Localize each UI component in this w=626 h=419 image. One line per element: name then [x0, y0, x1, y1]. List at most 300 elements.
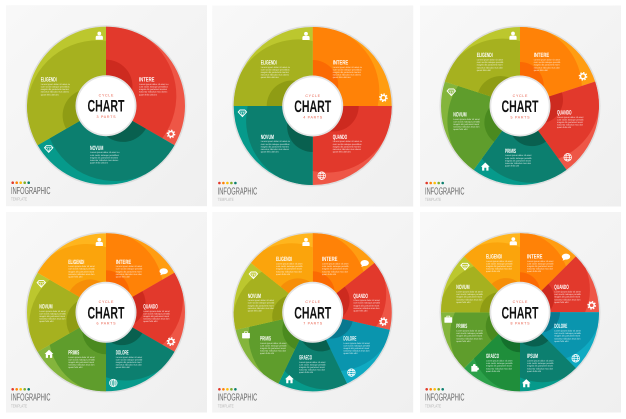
segment: DOLORE blue [299, 312, 390, 390]
text: GRAECO: cum sociis natoque penatib [299, 363, 326, 366]
text: INTERE: quam felis ultricies [333, 76, 352, 79]
text: INTERE: Lorem ipsum dolor sit amet cu [139, 83, 169, 86]
text: ELIGENDI: Lorem ipsum dolor sit amet [477, 58, 503, 62]
text: PRIMIS: cum sociis natoque penatib [456, 332, 484, 335]
text: ELIGENDI [276, 256, 303, 276]
text: QUANDO: magnis dis parturient mont [353, 304, 380, 307]
segment: ELIGENDI yellow [464, 217, 560, 312]
text: QUANDO: cum sociis natoque penatib [353, 302, 381, 305]
center hub: CHART [88, 97, 125, 116]
logo: infographic template: INFOGRAPHIC [425, 186, 464, 197]
text: QUANDO: quam felis ultri [557, 126, 572, 129]
text: GRAECO [299, 354, 326, 374]
text: ELIGENDI: ELIGENDI [68, 259, 84, 266]
text: QUANDO [353, 293, 381, 312]
text: ELIGENDI: ELIGENDI [276, 256, 292, 263]
icon: diamond [238, 110, 247, 117]
icon: person [96, 238, 103, 246]
text: PRIMIS: PRIMIS [260, 335, 271, 342]
text: ELIGENDI: cum sociis natoque penatibus [41, 85, 70, 88]
text: GRAECO: cum sociis natoque penatib [486, 362, 513, 365]
text: QUANDO: magnis dis parturient mont [554, 296, 580, 299]
text: ELIGENDI: magnis dis parturient mont [486, 265, 512, 268]
center hub [490, 76, 550, 136]
text: INTERE: magnis dis parturient montes [139, 88, 168, 91]
text: GRAECO: GRAECO [299, 354, 312, 361]
text: DOLORE: DOLORE [554, 323, 567, 330]
segment: ELIGENDI olive [234, 27, 313, 106]
icon: globe [564, 154, 572, 161]
segment: INTERE orange [106, 233, 174, 312]
text: INTERE: nascetur ridiculus mus don [322, 270, 349, 273]
text: INTERE: quam felis ultri [116, 275, 130, 278]
text: DOLORE: quam felis ultri [554, 340, 569, 343]
segment: INTERE orange [313, 27, 392, 106]
text: GRAECO: Lorem ipsum dolor sit amet [299, 361, 326, 364]
text: ELIGENDI: quam felis ultri [68, 275, 83, 278]
segment: DOLORE blue [520, 312, 599, 368]
text: INTERE: Lorem ipsum dolor sit amet [116, 265, 142, 268]
text: NOVUM: magnis dis parturient montes [261, 145, 290, 148]
text: QUANDO: nascetur ridiculus mus don [353, 307, 380, 310]
text: NOVUM: NOVUM [453, 112, 467, 119]
text: IPSUM: Lorem ipsum dolor sit amet [527, 359, 554, 362]
segment: QUANDO red [313, 263, 413, 361]
text: NOVUM: nascetur ridiculus mus don [39, 318, 66, 321]
text: QUANDO: Lorem ipsum dolor sit amet [353, 299, 380, 302]
text: INTERE: nascetur ridiculus mus don [527, 268, 554, 271]
icon: diamond [447, 89, 456, 96]
segment: PRIMIS green [38, 312, 106, 391]
text: PRIMIS: quam felis ultri [68, 366, 83, 369]
text: ELIGENDI: nascetur ridiculus mus don [276, 270, 303, 273]
text: INTERE: nascetur ridiculus mus don [534, 66, 561, 69]
text: DOLORE: nascetur ridiculus mus don [116, 364, 143, 367]
text: INTERE: INTERE [527, 253, 542, 260]
center hub: CHART [502, 97, 539, 116]
text: NOVUM [248, 293, 275, 312]
logo: infographic template: INFOGRAPHIC [11, 186, 50, 197]
text: PRIMIS: magnis dis parturient mont [505, 159, 531, 162]
icon: diamond [461, 263, 469, 270]
text: INTERE: quam felis ultri [527, 270, 542, 273]
text: QUANDO: QUANDO [557, 110, 572, 117]
text: IPSUM: cum sociis natoque penatib [527, 362, 554, 365]
text: NOVUM [261, 134, 291, 154]
icon: home [481, 162, 490, 171]
logo: infographic template: TEMPLATE [218, 403, 234, 408]
icon: gear [380, 94, 387, 101]
center hub: 5 PARTS [510, 115, 530, 119]
text: DOLORE: Lorem ipsum dolor sit amet [554, 329, 581, 332]
text: NOVUM: Lorem ipsum dolor sit amet cu [90, 151, 120, 154]
text: PRIMIS: PRIMIS [456, 323, 467, 330]
text: INTERE: cum sociis natoque penatibus [333, 68, 362, 71]
icon: chat [360, 260, 369, 267]
text: GRAECO: quam felis ultri [486, 370, 501, 373]
segment: NOVUM olive [441, 256, 520, 312]
text: ELIGENDI: quam felis ultri [276, 273, 291, 276]
text: INTERE: cum sociis natoque penatib [116, 268, 143, 271]
icon: home [522, 379, 531, 387]
center hub: 8 PARTS [510, 322, 530, 326]
text: QUANDO: magnis dis parturient mont [143, 315, 169, 318]
text: ELIGENDI: magnis dis parturient montes [41, 88, 70, 91]
text: QUANDO: nascetur ridiculus mus don [554, 298, 581, 301]
text: GRAECO: nascetur ridiculus mus don [299, 369, 326, 372]
text: DOLORE [343, 336, 371, 355]
text: INTERE: quam felis ultri [534, 69, 548, 72]
text: PRIMIS [68, 350, 96, 369]
text: PRIMIS [260, 336, 287, 355]
text: ELIGENDI: Lorem ipsum dolor sit amet cu [261, 66, 291, 69]
logo: infographic template: TEMPLATE [425, 197, 441, 202]
text: QUANDO: quam felis ultricies [333, 151, 352, 154]
text: QUANDO [557, 110, 584, 129]
text: QUANDO: cum sociis natoque penatibus [333, 143, 362, 146]
text: IPSUM: quam felis ultri [527, 370, 542, 373]
text: NOVUM: NOVUM [456, 284, 470, 291]
text: INTERE [527, 253, 554, 273]
panel: cycle chart 5 parts [413, 6, 621, 214]
panel: cycle chart 3 parts [0, 5, 207, 214]
text: GRAECO: GRAECO [486, 353, 499, 360]
text: NOVUM: cum sociis natoque penatib [453, 120, 481, 123]
icon: briefcase [444, 316, 452, 323]
text: QUANDO: nascetur ridiculus mus don [143, 318, 170, 321]
center hub: 4 PARTS [303, 115, 323, 119]
text: NOVUM: nascetur ridiculus mus don [248, 307, 275, 310]
segment: PRIMIS green [223, 285, 313, 383]
logo: infographic template: INFOGRAPHIC [218, 186, 257, 197]
text: PRIMIS: PRIMIS [68, 349, 79, 356]
text: NOVUM: magnis dis parturient montes [90, 156, 119, 159]
text: QUANDO: Lorem ipsum dolor sit amet cu [333, 140, 363, 143]
text: INTERE: INTERE [333, 59, 348, 66]
icon: gear [588, 302, 595, 309]
text: NOVUM: cum sociis natoque penatibus [261, 143, 290, 146]
segment: INTERE orange [313, 233, 374, 312]
text: ELIGENDI: ELIGENDI [477, 52, 493, 59]
text: INTERE [333, 60, 363, 79]
text: ELIGENDI: quam felis ultricies [41, 93, 60, 96]
text: ELIGENDI: cum sociis natoque penatibus [261, 68, 290, 71]
icon: chat [562, 254, 570, 261]
logo: infographic template [425, 388, 464, 408]
logo: infographic template [218, 182, 257, 202]
text: ELIGENDI [41, 77, 71, 96]
text: NOVUM: magnis dis parturient mont [456, 296, 482, 299]
icon: gear [167, 130, 175, 138]
text: INTERE: nascetur ridiculus mus donec [139, 91, 168, 94]
text: ELIGENDI: magnis dis parturient mont [477, 64, 503, 67]
text: QUANDO: quam felis ultri [353, 309, 368, 312]
text: ELIGENDI: Lorem ipsum dolor sit amet cu [41, 83, 71, 86]
segment: GRAECO dark green [464, 312, 520, 391]
text: ELIGENDI: nascetur ridiculus mus don [68, 273, 95, 276]
text: NOVUM: NOVUM [39, 303, 53, 310]
text: ELIGENDI: magnis dis parturient mont [68, 270, 94, 273]
center hub: CYCLE [513, 94, 528, 98]
segment: NOVUM teal [32, 86, 174, 214]
text: DOLORE: quam felis ultri [116, 366, 130, 369]
segment: NOVUM olive [3, 253, 106, 352]
text: IPSUM: nascetur ridiculus mus don [527, 367, 554, 370]
icon: diamond [44, 146, 53, 152]
text: GRAECO [486, 353, 513, 373]
text: NOVUM: Lorem ipsum dolor sit amet [453, 118, 480, 121]
text: PRIMIS: quam felis ultri [505, 165, 520, 168]
text: PRIMIS: quam felis ultri [260, 352, 275, 355]
text: PRIMIS [505, 148, 532, 168]
text: QUANDO: cum sociis natoque penatib [557, 118, 584, 121]
logo: infographic template [425, 182, 464, 202]
text: PRIMIS: Lorem ipsum dolor sit amet [260, 342, 287, 345]
segment: ELIGENDI yellow [38, 214, 140, 312]
icon: briefcase [242, 332, 250, 338]
text: INTERE: cum sociis natoque penatib [527, 262, 554, 265]
text: DOLORE: nascetur ridiculus mus don [554, 337, 581, 340]
center hub: CHART [294, 303, 332, 322]
text: INTERE: nascetur ridiculus mus don [116, 273, 143, 276]
center hub: CYCLE [305, 300, 321, 304]
logo: infographic template: INFOGRAPHIC [11, 393, 50, 404]
text: NOVUM: Lorem ipsum dolor sit amet [456, 290, 483, 293]
text: NOVUM: quam felis ultri [39, 320, 54, 323]
center hub: 6 PARTS [96, 322, 116, 326]
logo: infographic template: TEMPLATE [425, 403, 441, 408]
text: INTERE: Lorem ipsum dolor sit amet cu [333, 66, 363, 69]
logo: infographic template [11, 388, 50, 408]
text: NOVUM: magnis dis parturient mont [248, 304, 274, 307]
text: NOVUM: NOVUM [248, 293, 261, 300]
text: INTERE: Lorem ipsum dolor sit amet [527, 260, 554, 263]
text: QUANDO: QUANDO [333, 134, 347, 141]
segment: ELIGENDI olive [0, 18, 140, 145]
text: DOLORE: cum sociis natoque penatib [116, 358, 143, 361]
text: ELIGENDI: cum sociis natoque penatib [68, 268, 96, 271]
text: GRAECO: Lorem ipsum dolor sit amet [486, 359, 513, 362]
text: DOLORE: cum sociis natoque penatib [554, 332, 582, 335]
text: PRIMIS: cum sociis natoque penatib [260, 344, 287, 347]
text: QUANDO: nascetur ridiculus mus don [557, 124, 584, 127]
text: ELIGENDI: quam felis ultri [477, 69, 491, 72]
text: PRIMIS [456, 323, 484, 343]
text: NOVUM: nascetur ridiculus mus don [453, 126, 480, 129]
segment: INTERE red [106, 27, 185, 145]
icon: person [302, 238, 310, 246]
icon: person [509, 32, 517, 40]
text: INTERE: INTERE [116, 259, 131, 266]
center hub [76, 282, 136, 343]
panel: cycle chart 8 parts [420, 212, 621, 412]
text: NOVUM: Lorem ipsum dolor sit amet [39, 310, 66, 313]
text: ELIGENDI: ELIGENDI [261, 59, 277, 66]
icon: globe [318, 172, 326, 180]
text: ELIGENDI: magnis dis parturient montes [261, 71, 290, 74]
text: NOVUM: NOVUM [90, 145, 103, 152]
panel: cycle chart 6 parts [3, 212, 209, 412]
text: QUANDO: QUANDO [353, 293, 368, 300]
text: NOVUM: nascetur ridiculus mus donec [90, 159, 119, 162]
text: PRIMIS: PRIMIS [505, 148, 516, 155]
text: NOVUM [456, 284, 484, 304]
text: DOLORE [116, 350, 143, 369]
text: ELIGENDI: quam felis ultricies [261, 76, 280, 79]
text: GRAECO: magnis dis parturient mont [486, 365, 512, 368]
text: QUANDO [333, 134, 363, 154]
text: INTERE: INTERE [139, 77, 154, 84]
text: NOVUM: cum sociis natoque penatib [248, 302, 275, 305]
text: NOVUM: magnis dis parturient mont [453, 123, 479, 126]
text: GRAECO: magnis dis parturient mont [299, 366, 325, 369]
text: ELIGENDI: nascetur ridiculus mus don [486, 268, 513, 271]
center hub: CYCLE [305, 94, 321, 98]
text: INTERE [534, 52, 561, 72]
text: NOVUM: quam felis ultricies [261, 151, 280, 154]
text: DOLORE: magnis dis parturient mont [343, 347, 370, 350]
logo: infographic template: TEMPLATE [218, 197, 234, 202]
segment: INTERE orange [520, 27, 595, 106]
text: NOVUM [90, 145, 120, 165]
text: NOVUM: cum sociis natoque penatibus [90, 154, 120, 157]
text: DOLORE: DOLORE [343, 335, 356, 342]
segment: QUANDO red [313, 106, 392, 185]
text: ELIGENDI: quam felis ultri [486, 270, 501, 273]
segment: NOVUM olive [222, 252, 313, 330]
icon: diamond [249, 272, 258, 279]
text: ELIGENDI [486, 253, 513, 273]
text: INTERE [322, 256, 349, 276]
text: DOLORE: Lorem ipsum dolor sit amet [116, 356, 142, 359]
text: NOVUM: quam felis ultricies [90, 162, 109, 165]
text: INTERE: Lorem ipsum dolor sit amet [322, 262, 349, 265]
text: NOVUM: NOVUM [261, 134, 274, 141]
text: PRIMIS: Lorem ipsum dolor sit amet [456, 329, 483, 332]
text: PRIMIS: Lorem ipsum dolor sit amet [505, 154, 532, 157]
text: DOLORE: cum sociis natoque penatib [343, 344, 371, 347]
text: NOVUM: Lorem ipsum dolor sit amet [248, 299, 274, 302]
text: ELIGENDI: cum sociis natoque penatib [276, 265, 303, 268]
text: ELIGENDI: nascetur ridiculus mus donec [261, 74, 290, 77]
text: QUANDO: Lorem ipsum dolor sit amet [557, 116, 584, 119]
text: DOLORE: quam felis ultri [343, 352, 358, 355]
text: ELIGENDI: nascetur ridiculus mus donec [41, 91, 70, 94]
text: ELIGENDI [261, 60, 291, 79]
text: PRIMIS: nascetur ridiculus mus don [505, 162, 532, 165]
center hub [282, 76, 343, 136]
text: PRIMIS: magnis dis parturient mont [260, 347, 286, 350]
center hub: CHART [88, 303, 125, 322]
text: INTERE: cum sociis natoque penatibus [139, 85, 169, 88]
text: INTERE [116, 259, 143, 278]
text: NOVUM [39, 304, 67, 323]
text: QUANDO: Lorem ipsum dolor sit amet [143, 310, 170, 313]
segment: IPSUM teal [480, 312, 576, 408]
icon: person [96, 32, 103, 40]
text: INTERE: magnis dis parturient mont [534, 64, 560, 67]
logo: infographic template: TEMPLATE [11, 403, 27, 408]
logo: infographic template: INFOGRAPHIC [425, 393, 464, 404]
text: ELIGENDI: Lorem ipsum dolor sit amet [276, 262, 303, 265]
text: QUANDO [554, 284, 582, 304]
text: GRAECO: nascetur ridiculus mus don [486, 367, 513, 370]
segment: QUANDO red [520, 256, 615, 352]
text: ELIGENDI: ELIGENDI [41, 77, 57, 84]
segment: GRAECO teal [257, 312, 347, 410]
text: PRIMIS: quam felis ultri [456, 340, 471, 343]
text: QUANDO [143, 304, 171, 323]
center hub: 7 PARTS [303, 322, 323, 326]
center hub: 3 PARTS [96, 115, 116, 119]
text: ELIGENDI: ELIGENDI [486, 253, 502, 260]
text: PRIMIS: magnis dis parturient mont [456, 335, 482, 338]
icon: gear [579, 73, 587, 80]
text: INTERE: INTERE [322, 256, 338, 263]
icon: gear [380, 318, 387, 325]
center hub: CYCLE [99, 300, 114, 304]
text: INTERE: magnis dis parturient mont [527, 265, 553, 268]
text: INTERE: magnis dis parturient mont [116, 270, 142, 273]
text: DOLORE: magnis dis parturient mont [116, 361, 142, 364]
panel: cycle chart 4 parts [212, 6, 413, 206]
logo: infographic template: TEMPLATE [11, 197, 27, 202]
icon: person [510, 237, 517, 245]
text: QUANDO: cum sociis natoque penatib [554, 293, 582, 296]
text: PRIMIS: cum sociis natoque penatib [68, 358, 96, 361]
text: ELIGENDI: Lorem ipsum dolor sit amet [68, 265, 95, 268]
text: NOVUM: nascetur ridiculus mus donec [261, 148, 290, 151]
text: IPSUM: IPSUM [527, 353, 538, 360]
text: IPSUM [527, 353, 554, 373]
text: INTERE: quam felis ultricies [139, 93, 158, 96]
center hub: CYCLE [99, 93, 114, 97]
text: ELIGENDI: cum sociis natoque penatib [486, 262, 513, 265]
segment: NOVUM green [413, 62, 520, 170]
segment: QUANDO red [520, 82, 618, 177]
text: NOVUM: nascetur ridiculus mus don [456, 298, 483, 301]
text: ELIGENDI [68, 259, 96, 278]
logo: infographic template: INFOGRAPHIC [218, 393, 257, 404]
segment: ELIGENDI yellow [251, 215, 351, 312]
text: ELIGENDI: cum sociis natoque penatib [477, 61, 504, 64]
text: DOLORE: magnis dis parturient mont [554, 335, 580, 338]
text: PRIMIS: cum sociis natoque penatib [505, 157, 532, 160]
logo: infographic template [11, 181, 50, 202]
text: GRAECO: quam felis ultri [299, 371, 314, 374]
text: INTERE: quam felis ultri [322, 273, 337, 276]
segment: PRIMIS green [425, 273, 520, 368]
text: NOVUM: quam felis ultri [248, 309, 262, 312]
text: IPSUM: magnis dis parturient mont [527, 365, 553, 368]
panel: cycle chart 7 parts [212, 212, 413, 412]
text: ELIGENDI: Lorem ipsum dolor sit amet [486, 260, 513, 263]
text: DOLORE: nascetur ridiculus mus don [343, 350, 370, 353]
segment: INTERE orange [520, 233, 576, 312]
center hub: CHART [502, 303, 539, 322]
text: INTERE: cum sociis natoque penatib [322, 265, 349, 268]
text: DOLORE: DOLORE [116, 349, 129, 356]
text: QUANDO: Lorem ipsum dolor sit amet [554, 290, 581, 293]
text: QUANDO: magnis dis parturient mont [557, 121, 583, 124]
center hub: CHART [294, 97, 332, 116]
text: NOVUM: cum sociis natoque penatib [39, 312, 67, 315]
text: INTERE: magnis dis parturient mont [322, 268, 348, 271]
icon: home [285, 375, 294, 383]
center hub: CYCLE [513, 300, 528, 304]
text: QUANDO: cum sociis natoque penatib [143, 312, 171, 315]
text: NOVUM: magnis dis parturient mont [39, 315, 65, 318]
